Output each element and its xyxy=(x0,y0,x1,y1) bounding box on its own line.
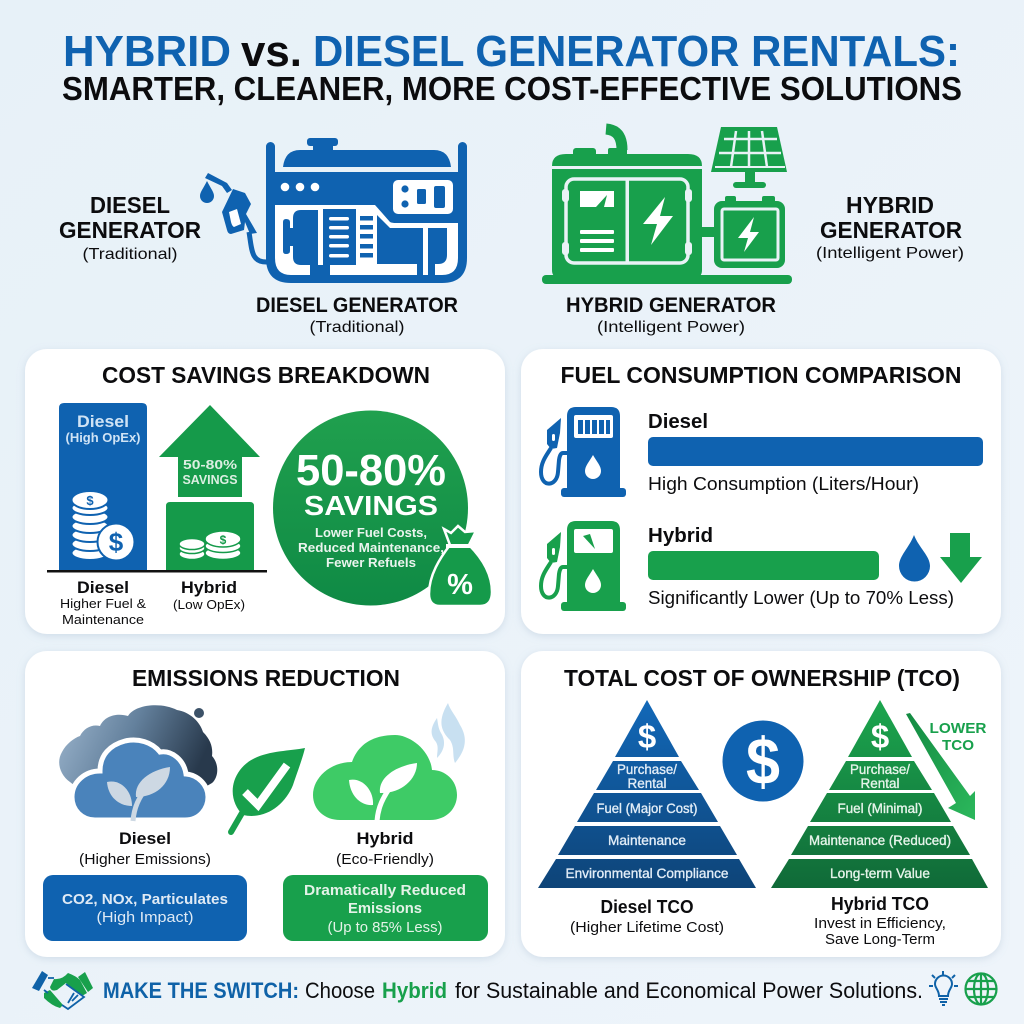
title xyxy=(62,27,962,107)
engine xyxy=(283,209,447,276)
hybrid TCO pyramid: Rental xyxy=(860,775,900,791)
title: vs. xyxy=(241,27,302,76)
hybrid TCO pyramid xyxy=(771,700,988,888)
hybrid caption: HYBRID GENERATOR xyxy=(566,294,776,317)
diesel bar: Diesel xyxy=(648,411,708,433)
diesel generator caption: (Traditional) xyxy=(310,319,404,336)
arrow: lower TCO: LOWER xyxy=(930,720,987,737)
diesel TCO label: (Higher Lifetime Cost) xyxy=(570,919,724,936)
savings circle: 50-80% xyxy=(296,446,446,495)
call to action text xyxy=(103,978,923,1003)
arrow: lower TCO xyxy=(906,713,987,820)
icon: money bag xyxy=(429,526,492,606)
icon: fuel nozzle and drop xyxy=(200,173,268,262)
icon: coin stack: $ xyxy=(86,493,94,508)
title: HYBRID xyxy=(63,27,231,76)
arrow: lower TCO: TCO xyxy=(942,737,974,754)
hybrid bar xyxy=(648,525,954,608)
diesel side label: GENERATOR xyxy=(59,217,201,243)
icon: hybrid generator with solar panel and battery xyxy=(542,127,792,284)
callout: hybrid emissions xyxy=(283,875,488,941)
bar labels xyxy=(60,578,245,627)
diesel cost bar: (High OpEx) xyxy=(66,430,140,445)
diesel emissions label: (Higher Emissions) xyxy=(79,851,211,868)
diesel TCO label: Diesel TCO xyxy=(600,897,694,917)
callout: hybrid emissions: Emissions xyxy=(348,900,422,917)
icon: money bag: % xyxy=(447,569,473,601)
heading: fuel consumption: FUEL CONSUMPTION COMPARISON xyxy=(560,362,962,388)
hybrid side label: (Intelligent Power) xyxy=(816,245,964,262)
hybrid TCO pyramid: Long-term Value xyxy=(830,865,930,881)
hybrid side label xyxy=(816,192,964,262)
diesel TCO label xyxy=(570,897,724,936)
diesel TCO pyramid: Environmental Compliance xyxy=(566,865,729,881)
bar labels: Diesel xyxy=(77,578,129,597)
diesel emissions label: Diesel xyxy=(119,829,171,848)
icon: hybrid cloud with plant xyxy=(313,735,457,821)
savings circle: Fewer Refuels xyxy=(326,555,416,570)
savings arrow: SAVINGS xyxy=(182,472,238,487)
battery xyxy=(714,196,785,268)
icon: globe xyxy=(966,974,996,1004)
diesel side label: DIESEL xyxy=(90,192,170,218)
icon: diesel generator with fuel nozzle xyxy=(200,138,467,283)
heading: cost savings: COST SAVINGS BREAKDOWN xyxy=(102,362,430,388)
diesel cost bar: Diesel xyxy=(77,412,129,431)
heading: emissions: EMISSIONS REDUCTION xyxy=(132,665,400,691)
savings circle xyxy=(273,410,468,606)
hybrid emissions label: Hybrid xyxy=(356,829,414,848)
diesel TCO pyramid: Maintenance xyxy=(608,832,686,848)
bar labels: Hybrid xyxy=(181,578,237,597)
callout: hybrid emissions: (Up to 85% Less) xyxy=(328,919,442,936)
hybrid bar: Significantly Lower (Up to 70% Less) xyxy=(648,588,954,608)
footer banner xyxy=(32,971,996,1009)
icon: hybrid fuel pump xyxy=(541,521,626,611)
hybrid cost bar xyxy=(166,502,254,570)
panel: emissions reduction xyxy=(25,651,505,957)
icon: small coins: $ xyxy=(220,533,227,547)
savings circle: SAVINGS xyxy=(304,490,438,521)
icon: diesel cloud with plant xyxy=(72,740,208,821)
icon: steam xyxy=(432,703,465,763)
icon: coin stack: $ xyxy=(109,527,124,557)
savings circle: Reduced Maintenance, xyxy=(298,540,444,555)
icon: dollar circle: $ xyxy=(746,724,780,798)
callout: diesel emissions: CO2, NOx, Particulates xyxy=(62,891,228,908)
heading: TCO: TOTAL COST OF OWNERSHIP (TCO) xyxy=(564,665,960,691)
diesel TCO pyramid xyxy=(538,700,756,888)
panel: total cost of ownership xyxy=(521,651,1001,957)
panel: cost savings breakdown xyxy=(25,349,505,634)
hybrid TCO label: Save Long-Term xyxy=(825,932,935,948)
panel: fuel consumption comparison xyxy=(521,349,1001,634)
title: DIESEL GENERATOR RENTALS: xyxy=(313,27,960,76)
hybrid TCO pyramid: Fuel (Minimal) xyxy=(838,800,922,816)
icon: down arrow xyxy=(940,533,982,583)
callout: diesel emissions xyxy=(43,875,247,941)
chart baseline xyxy=(47,570,267,572)
solar panel xyxy=(711,127,787,188)
savings circle: Lower Fuel Costs, xyxy=(315,525,427,540)
hybrid TCO pyramid: $ xyxy=(871,718,889,755)
diesel TCO pyramid: Purchase/ xyxy=(617,761,677,777)
call to action text: for Sustainable and Economical Power Solutions. xyxy=(455,978,923,1003)
diesel cost bar xyxy=(59,403,147,570)
hybrid bar: Hybrid xyxy=(648,525,713,547)
diesel generator caption: DIESEL GENERATOR xyxy=(256,294,458,317)
diesel emissions label xyxy=(79,829,211,868)
callout: hybrid emissions: Dramatically Reduced xyxy=(304,882,466,899)
bar labels: (Low OpEx) xyxy=(173,597,245,612)
diesel bar: High Consumption (Liters/Hour) xyxy=(648,474,919,494)
diesel generator caption xyxy=(256,294,458,336)
hybrid side label: HYBRID xyxy=(846,192,934,218)
generator body xyxy=(542,129,792,284)
hybrid caption xyxy=(566,294,776,336)
hybrid TCO pyramid: Purchase/ xyxy=(850,761,910,777)
call to action text: Hybrid xyxy=(382,978,447,1003)
hybrid side label: GENERATOR xyxy=(820,217,962,243)
hybrid emissions label xyxy=(336,829,434,868)
diesel side label: (Traditional) xyxy=(82,246,178,263)
call to action text: Choose xyxy=(305,978,375,1003)
hybrid TCO pyramid: Maintenance (Reduced) xyxy=(809,832,951,848)
diesel TCO pyramid: $ xyxy=(638,718,656,755)
diesel bar xyxy=(648,411,983,494)
icon: dark smoke cloud xyxy=(59,705,217,790)
diesel TCO pyramid: Rental xyxy=(628,775,666,791)
icon: handshake xyxy=(32,971,93,1009)
hybrid caption: (Intelligent Power) xyxy=(597,319,745,336)
icon: diesel fuel pump xyxy=(541,407,626,497)
hybrid TCO label xyxy=(814,894,946,948)
icon: smoke particle xyxy=(194,708,204,718)
diesel side label xyxy=(59,192,201,263)
generator frame and tank xyxy=(266,138,467,283)
hybrid TCO label: Hybrid TCO xyxy=(831,894,929,914)
icon: leaf with checkmark xyxy=(231,748,305,832)
icon: light bulb xyxy=(929,971,958,1005)
savings arrow: 50-80% xyxy=(183,457,238,472)
savings arrow xyxy=(159,405,260,497)
bar labels: Higher Fuel & xyxy=(60,596,146,611)
title: SMARTER, CLEANER, MORE COST-EFFECTIVE SOLUTIONS xyxy=(62,70,962,107)
hybrid TCO label: Invest in Efficiency, xyxy=(814,916,946,932)
icon: coin stack xyxy=(72,491,134,560)
callout: diesel emissions: (High Impact) xyxy=(96,909,194,926)
icon: blue drop xyxy=(899,535,930,582)
call to action text: MAKE THE SWITCH: xyxy=(103,978,299,1003)
diesel TCO pyramid: Fuel (Major Cost) xyxy=(596,800,698,816)
icon: dollar circle xyxy=(722,720,804,802)
hybrid emissions label: (Eco-Friendly) xyxy=(336,851,434,868)
bar labels: Maintenance xyxy=(62,612,144,627)
